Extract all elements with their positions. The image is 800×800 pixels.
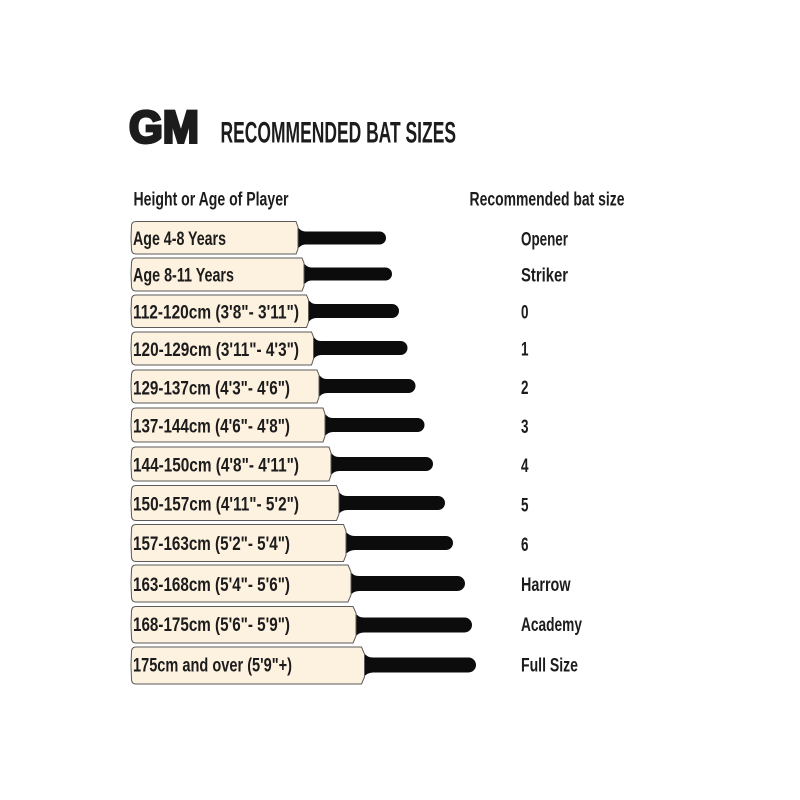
bat: Age 4-8 Years [131,222,386,254]
bat: 144-150cm: 144-150cm (4'8"- 4'11") [133,455,299,477]
bat: 150-157cm [131,486,445,520]
size: 5: 5 [521,495,529,517]
bat: 137-144cm: 137-144cm (4'6"- 4'8") [133,416,290,438]
bat: Age 8-11 Years [131,258,392,291]
bat: 168-175cm: 168-175cm (5'6"- 5'9") [133,614,290,636]
size: Academy: Academy [521,614,582,636]
bat: 112-120cm [131,295,399,328]
bat: 163-168cm [131,565,465,602]
bat: 120-129cm [131,332,408,365]
bat: 175cm and over [131,647,476,684]
size: 1: 1 [521,339,529,361]
logo: GM: GM [129,102,199,152]
column heading: recommended bat size: Recommended bat size [470,188,625,210]
bat: Age 4-8 Years: Age 4-8 Years [133,228,226,250]
bat: 175cm and over: 175cm and over (5'9"+) [133,655,292,677]
size: Harrow: Harrow [521,574,571,596]
size column [521,228,582,676]
bat: 150-157cm: 150-157cm (4'11"- 5'2") [133,494,299,516]
size: 4: 4 [521,455,529,477]
bat: 112-120cm: 112-120cm (3'8"- 3'11") [133,301,299,323]
size: 2: 2 [521,377,529,399]
column heading: height or age: Height or Age of Player [134,188,289,210]
bat: 129-137cm: 129-137cm (4'3"- 4'6") [133,377,290,399]
bat: 157-163cm [131,524,453,562]
size: 6: 6 [521,534,529,556]
bat: 157-163cm: 157-163cm (5'2"- 5'4") [133,533,290,555]
bat: 168-175cm [131,606,472,643]
title: RECOMMENDED BAT SIZES [220,116,456,150]
bat: 163-168cm: 163-168cm (5'4"- 5'6") [133,574,290,596]
size: Opener: Opener [521,228,568,250]
bat: Age 8-11 Years: Age 8-11 Years [133,264,234,286]
size: 0: 0 [521,301,529,323]
size: Full Size: Full Size [521,654,578,676]
bat: 144-150cm [131,447,433,481]
bat: 137-144cm [131,408,425,442]
bat: 129-137cm [131,370,416,403]
size: Striker: Striker [521,264,568,286]
size: 3: 3 [521,416,529,438]
bat: 120-129cm: 120-129cm (3'11"- 4'3") [133,339,299,361]
